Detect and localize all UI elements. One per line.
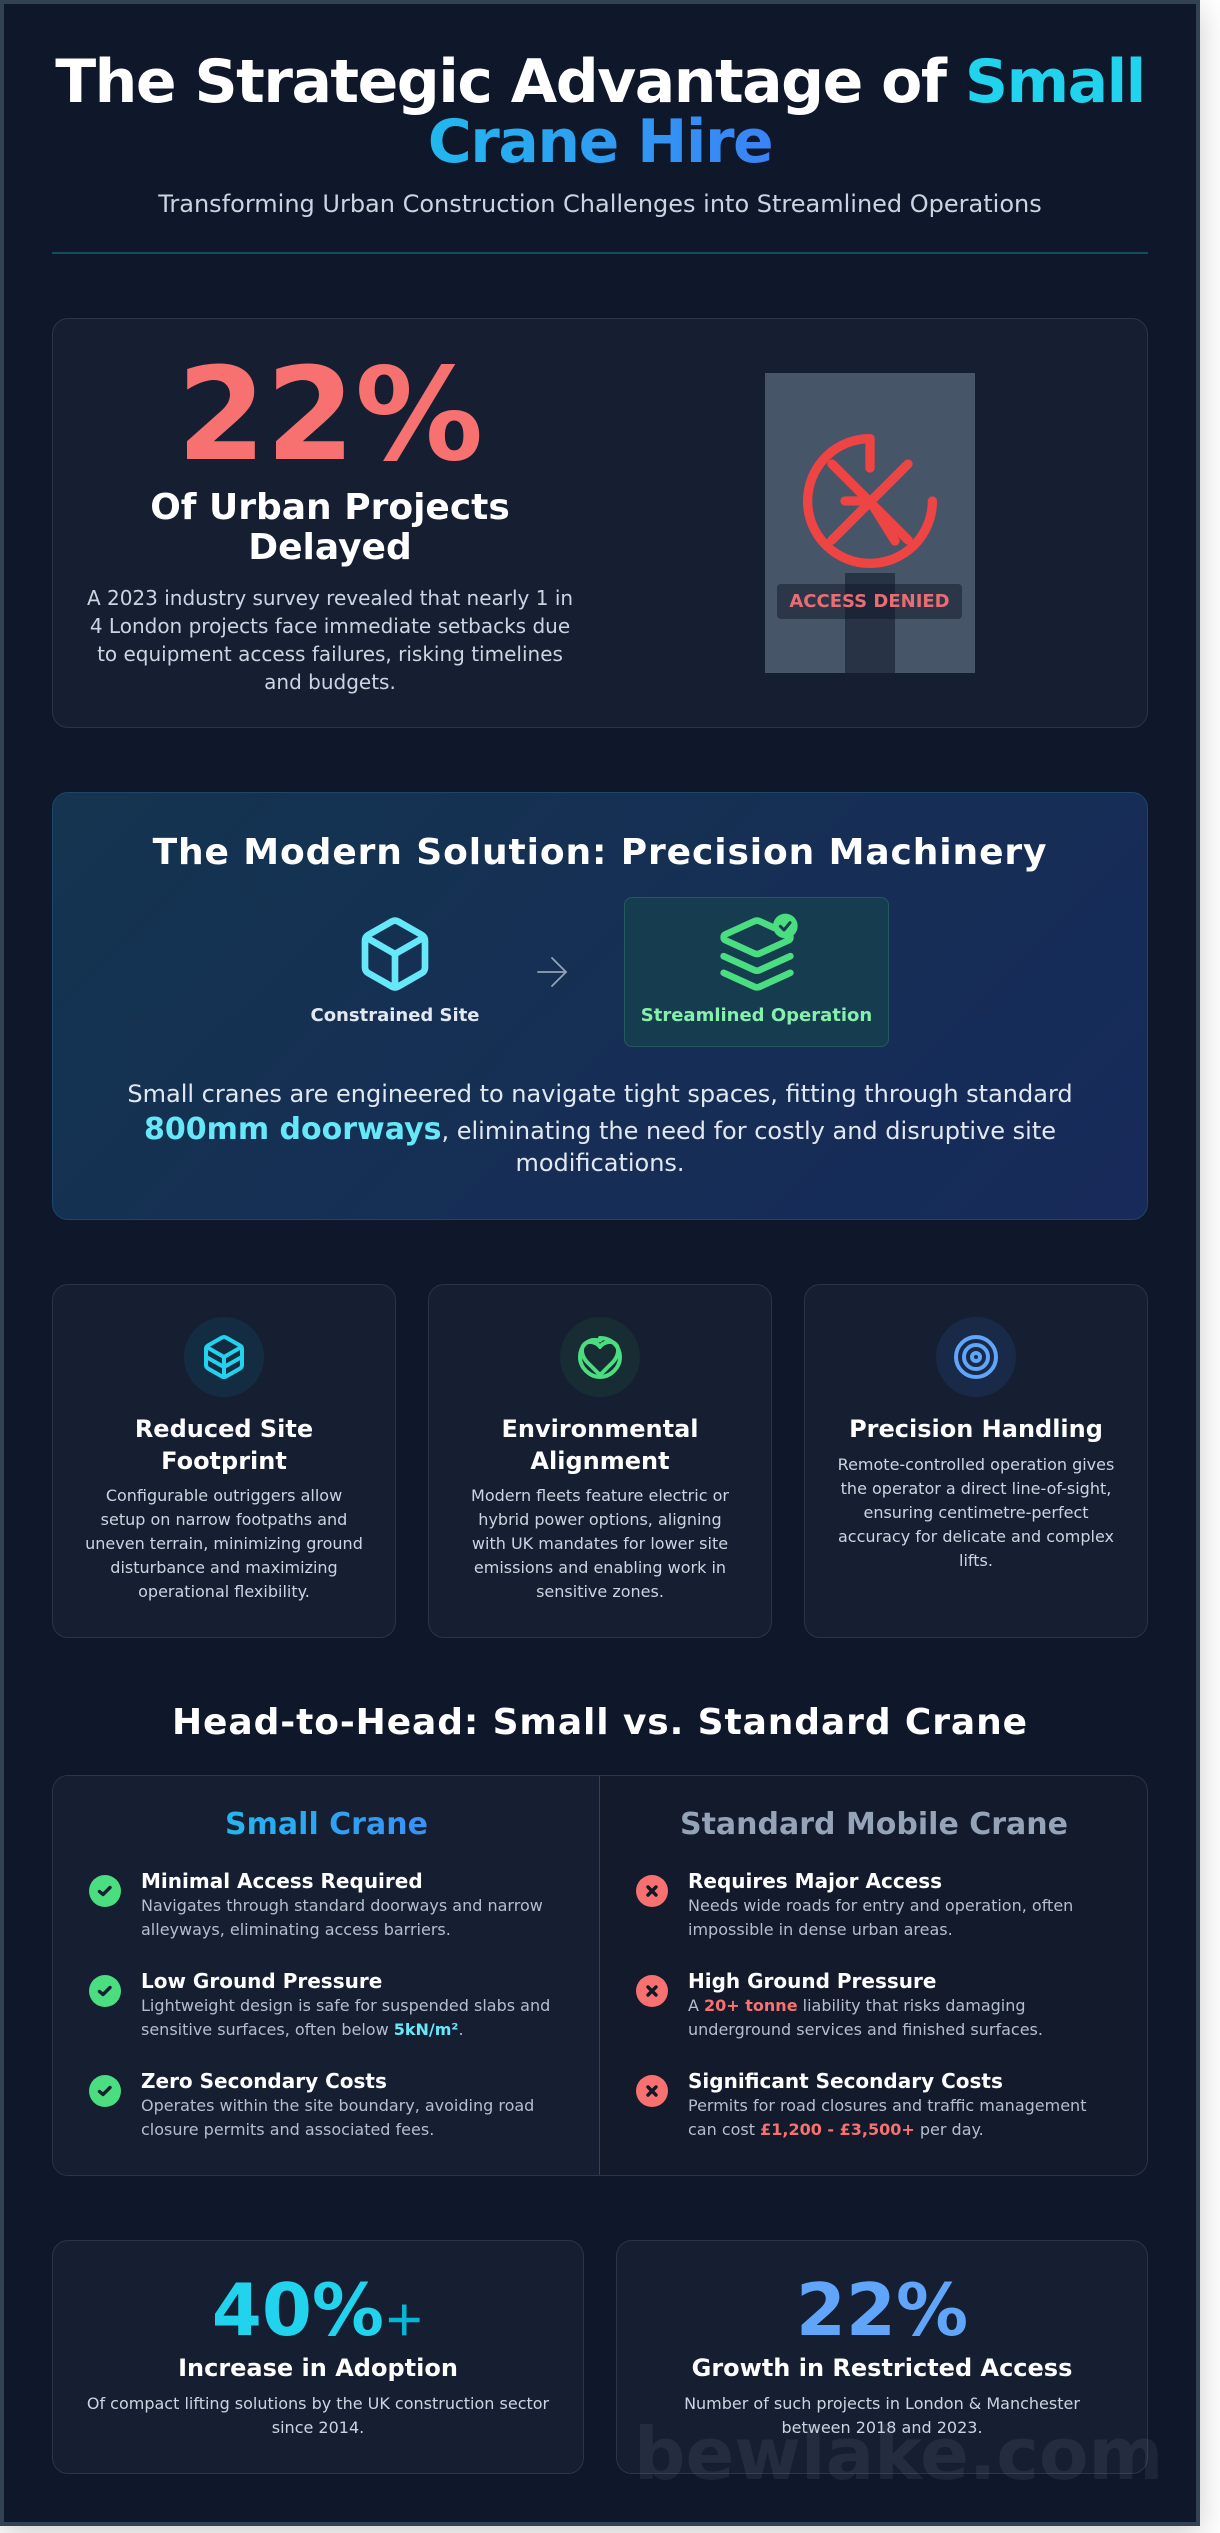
text: survey: to equipment access failures, risking timelines <box>97 642 563 666</box>
item: low ground pressure: Low Ground Pressure <box>141 1969 382 1993</box>
text: Configurable outriggers allow <box>106 1486 342 1505</box>
item: high ground pressure: High Ground Pressure <box>688 1969 936 1993</box>
text: disturbance and maximizing <box>110 1558 338 1577</box>
title <box>55 47 1145 177</box>
heading: of urban projects delayed: Delayed <box>248 527 412 568</box>
item: significant secondary costs <box>636 2069 1086 2139</box>
heading <box>501 1415 699 1475</box>
item: minimal access: Minimal Access Required <box>141 1869 423 1893</box>
label: access denied: ACCESS DENIED <box>789 591 950 612</box>
icon: footprint <box>184 1317 264 1397</box>
panel: delayed projects <box>52 318 1148 728</box>
panel: environmental alignment <box>428 1284 772 1638</box>
heading: Alignment <box>530 1447 670 1475</box>
text: the operator a direct line-of-sight, <box>841 1479 1111 1498</box>
text: ensuring centimetre-perfect <box>863 1503 1089 1522</box>
item: high ground pressure: underground services and finished surfaces. <box>688 2020 1043 2039</box>
title: Crane Hire <box>428 107 772 177</box>
header divider <box>52 252 1148 254</box>
item: significant secondary costs: Permits for road closures and traffic management <box>688 2096 1086 2115</box>
item: zero secondary costs <box>89 2069 534 2139</box>
heading: head to head: Head-to-Head: Small vs. Standard Crane <box>172 1702 1028 1743</box>
item: requires major access: impossible in dense urban areas. <box>688 1920 953 1939</box>
icon: heart <box>560 1317 640 1397</box>
column title <box>53 1807 600 1843</box>
item: minimal access <box>89 1869 543 1939</box>
item: significant secondary costs: Significant Secondary Costs <box>688 2069 1003 2093</box>
item: minimal access: Navigates through standard doorways and narrow <box>141 1896 543 1915</box>
column title: Standard Mobile Crane <box>680 1807 1068 1842</box>
item: zero secondary costs: closure permits and associated fees. <box>141 2120 434 2139</box>
panel: streamlined operation <box>624 897 889 1047</box>
text: between 2018 and 2023. <box>781 2418 983 2437</box>
item: zero secondary costs: Operates within the site boundary, avoiding road <box>141 2096 534 2115</box>
text: accuracy for delicate and complex <box>838 1527 1114 1546</box>
title: The Strategic Advantage of Small <box>55 47 1145 117</box>
text: modifications. <box>515 1149 685 1177</box>
panel: precision handling <box>804 1284 1148 1638</box>
text: Modern fleets feature electric or <box>471 1486 729 1505</box>
panel: comparison table <box>52 1775 1148 2176</box>
watermark: bewlake.com <box>634 2412 1163 2496</box>
text: uneven terrain, minimizing ground <box>85 1534 363 1553</box>
column: small crane <box>53 1776 600 2176</box>
text <box>85 1486 363 1601</box>
text: solution: Small cranes are engineered to navigate tight spaces, fitting through standard <box>127 1080 1073 1108</box>
panel: modern solution <box>52 792 1148 1220</box>
heading: modern solution: The Modern Solution: Precision Machinery <box>153 832 1047 873</box>
text: Number of such projects in London & Manchester <box>684 2394 1080 2413</box>
text: Remote-controlled operation gives <box>838 1455 1114 1474</box>
text <box>838 1455 1114 1570</box>
panel: growth in restricted access <box>616 2240 1148 2474</box>
item: low ground pressure <box>89 1969 550 2039</box>
text: 800mm doorways, eliminating the need for costly and disruptive site <box>144 1112 1056 1147</box>
text <box>87 2394 550 2437</box>
item: significant secondary costs: can cost £1,200 - £3,500+ per day. <box>688 2120 984 2139</box>
icon: target <box>936 1317 1016 1397</box>
item: low ground pressure: sensitive surfaces, often below 5kN/m². <box>141 2020 464 2039</box>
text: lifts. <box>959 1551 993 1570</box>
stat: 40%+: 40%+ <box>212 2268 424 2352</box>
text: emissions and enabling work in <box>474 1558 726 1577</box>
heading: Precision Handling <box>849 1415 1103 1443</box>
column: standard mobile crane <box>636 1807 1086 2139</box>
text: survey: 4 London projects face immediate setbacks due <box>90 614 570 638</box>
item: high ground pressure: A 20+ tonne liability that risks damaging <box>688 1996 1026 2015</box>
icon: constrained site cube <box>362 917 428 991</box>
text: survey: and budgets. <box>264 670 396 694</box>
label: streamlined operation: Streamlined Operation <box>641 1005 872 1026</box>
door <box>845 573 895 673</box>
text: since 2014. <box>272 2418 364 2437</box>
label: access denied <box>777 584 962 619</box>
subtitle: Transforming Urban Construction Challenges into Streamlined Operations <box>158 190 1042 218</box>
text: hybrid power options, aligning <box>478 1510 722 1529</box>
icon: layers with check <box>720 914 798 991</box>
heading: of urban projects delayed <box>150 487 510 568</box>
item: requires major access: Requires Major Access <box>688 1869 942 1893</box>
text <box>684 2394 1080 2437</box>
heading: Increase in Adoption <box>178 2354 458 2382</box>
heading: Growth in Restricted Access <box>692 2354 1072 2382</box>
item: low ground pressure: Lightweight design is safe for suspended slabs and <box>141 1996 550 2015</box>
panel: increase in adoption <box>52 2240 584 2474</box>
heading <box>135 1415 313 1475</box>
stat: 22%: 22% <box>177 341 483 490</box>
text: survey: A 2023 industry survey revealed that nearly 1 in <box>87 586 573 610</box>
heading: Reduced Site <box>135 1415 313 1443</box>
item: zero secondary costs: Zero Secondary Costs <box>141 2069 387 2093</box>
text <box>471 1486 729 1601</box>
icon: access blocked <box>802 434 938 568</box>
column title: Small Crane <box>225 1807 428 1842</box>
text: operational flexibility. <box>138 1582 310 1601</box>
text: setup on narrow footpaths and <box>101 1510 347 1529</box>
arrow <box>537 957 567 987</box>
item: minimal access: alleyways, eliminating access barriers. <box>141 1920 451 1939</box>
heading: of urban projects delayed: Of Urban Projects <box>150 487 510 528</box>
heading: Environmental <box>501 1415 699 1443</box>
illustration: blocked doorway <box>765 373 975 673</box>
item: high ground pressure <box>636 1969 1043 2039</box>
label: constrained site: Constrained Site <box>310 1005 480 1026</box>
stat: 22%: 22% <box>796 2268 968 2352</box>
item: requires major access: Needs wide roads for entry and operation, often <box>688 1896 1073 1915</box>
text: with UK mandates for lower site <box>472 1534 728 1553</box>
panel: reduced site footprint <box>52 1284 396 1638</box>
heading: Footprint <box>161 1447 287 1475</box>
item: requires major access <box>636 1869 1073 1939</box>
text: survey <box>87 586 573 694</box>
text: sensitive zones. <box>536 1582 664 1601</box>
text: Of compact lifting solutions by the UK construction sector <box>87 2394 549 2413</box>
